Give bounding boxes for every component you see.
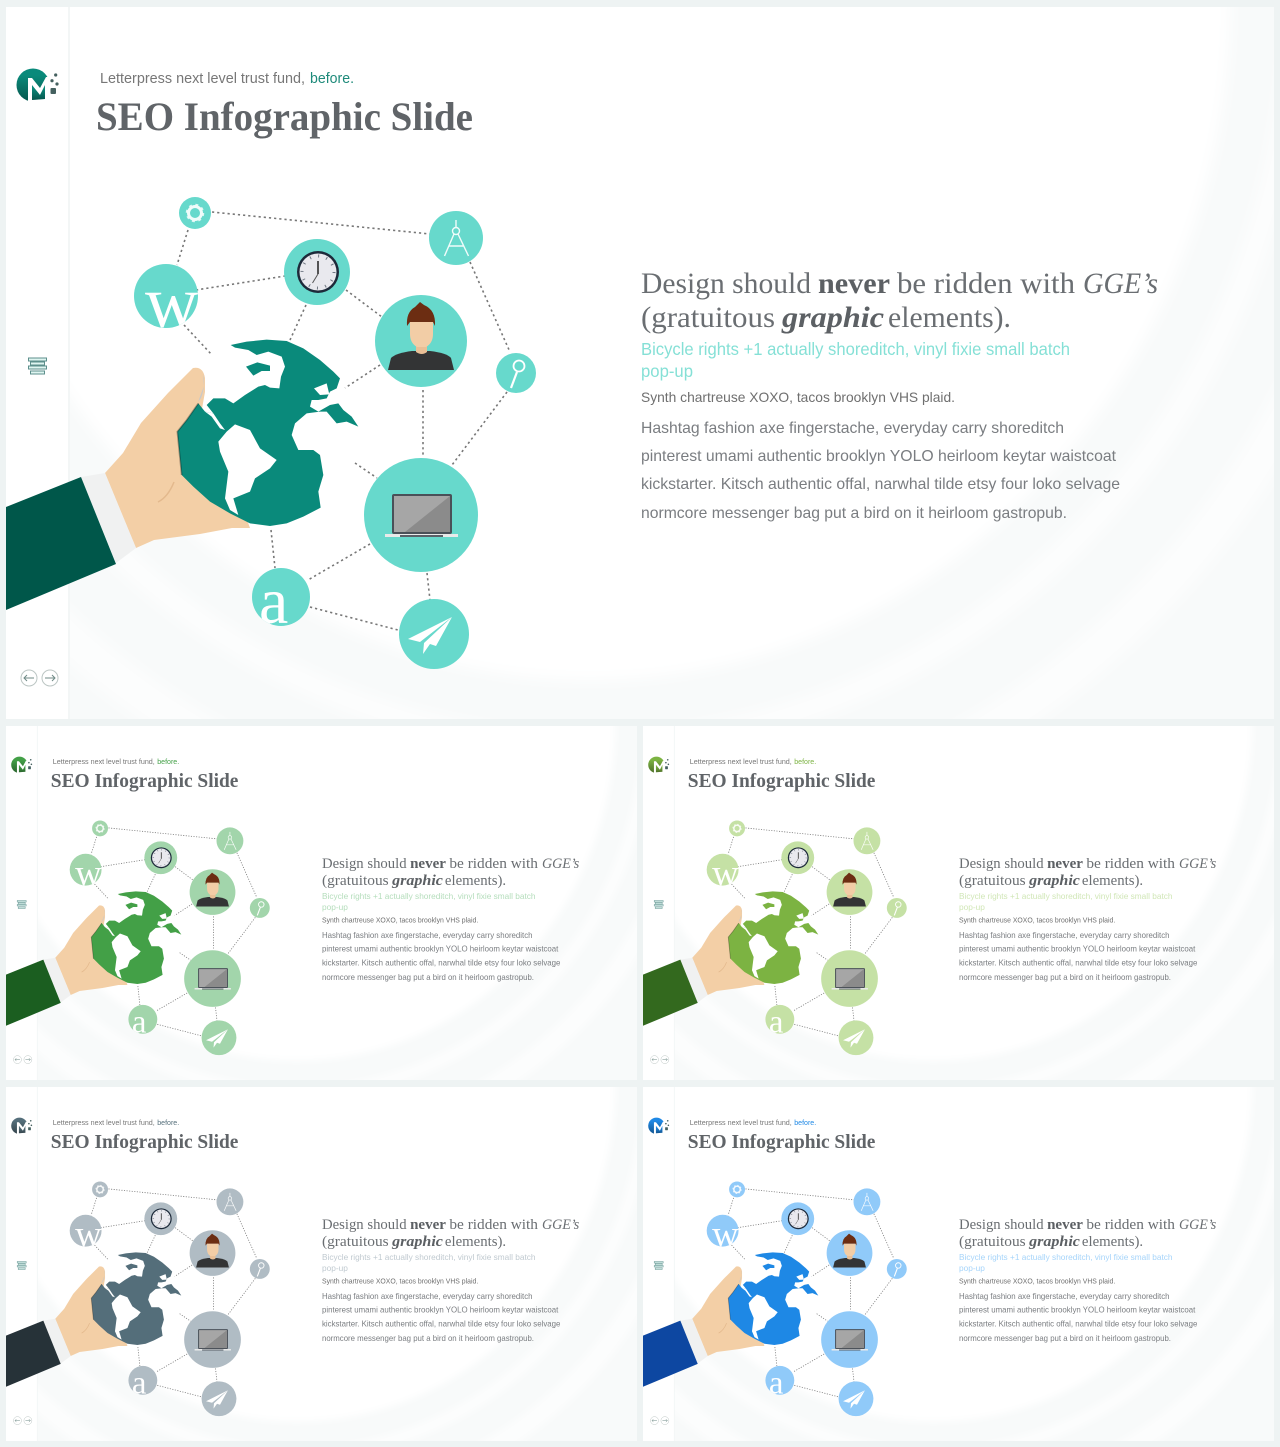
text block: (gratuitous [959,873,1026,889]
icon: a circle [252,568,310,626]
text block: graphic [1028,873,1080,889]
text block: (gratuitous [322,1234,389,1250]
dotted connection lines [177,212,510,630]
text block: pop-up [959,902,985,912]
hand [105,368,250,548]
text block: pop-up [322,902,348,912]
slide background and sidebar [0,305,695,1140]
text block: GGE’s [1083,267,1158,300]
header: Letterpress next level trust fund, [53,1118,155,1127]
icon: a letter: a [769,1365,784,1401]
header [688,757,876,792]
slide background and sidebar [0,0,1280,840]
text block: Design should [959,1217,1044,1233]
header: SEO Infographic Slide [96,94,473,139]
icon: paper plane [399,599,469,669]
text block: Hashtag fashion axe fingerstache, everyday carry shoreditch [322,931,532,940]
text block: Synth chartreuse XOXO, tacos brooklyn VHS plaid. [959,917,1115,924]
icon: w letter: w [712,852,739,893]
icon: w letter: w [145,262,199,344]
icon: magnifier [496,353,536,393]
text block: pinterest umami authentic brooklyn YOLO heirloom keytar waistcoat [959,945,1196,954]
header [96,70,473,139]
text block: elements). [445,1234,506,1250]
icon: a letter: a [259,565,288,638]
icon: w letter: w [75,1213,102,1254]
text block: be ridden with [1086,856,1176,872]
text block: kickstarter. Kitsch authentic offal, narwhal tilde etsy four loko selvage [959,1320,1198,1329]
text block: elements). [888,301,1011,334]
text block: normcore messenger bag put a bird on it heirloom gastropub. [959,1334,1171,1343]
text block: Design should [959,856,1044,872]
text block: Design should [322,1217,407,1233]
text block: be ridden with [449,856,539,872]
slide: blue variant [643,1087,1274,1441]
text block: kickstarter. Kitsch authentic offal, narwhal tilde etsy four loko selvage [641,476,1120,493]
text block: be ridden with [897,267,1075,300]
icon: w letter: w [712,1213,739,1254]
text block: GGE’s [1179,856,1216,872]
text block: pop-up [641,361,693,381]
text block: Bicycle rights +1 actually shoreditch, vinyl fixie small batch [322,1252,536,1262]
text block: GGE’s [542,1217,579,1233]
sleeve [6,477,116,610]
text block: pinterest umami authentic brooklyn YOLO heirloom keytar waistcoat [641,448,1117,465]
text block: be ridden with [1086,1217,1176,1233]
text block: pinterest umami authentic brooklyn YOLO heirloom keytar waistcoat [322,1306,559,1315]
globe [177,340,358,526]
icon: a letter: a [769,1004,784,1040]
icon: navigation arrows [21,670,58,686]
header: before. [157,757,179,766]
header: before. [794,1118,816,1127]
icon: gear [179,197,211,229]
slide: lime variant [643,726,1274,1080]
header: before. [310,70,354,87]
text block: GGE’s [542,856,579,872]
header [51,757,239,792]
text block: kickstarter. Kitsch authentic offal, narwhal tilde etsy four loko selvage [322,1320,561,1329]
slide background and sidebar [0,666,695,1447]
header: Letterpress next level trust fund, [100,70,305,87]
text block: elements). [1082,873,1143,889]
text block: Design should [322,856,407,872]
illustration [643,1181,907,1416]
illustration [643,820,907,1055]
icon: clock [284,239,350,305]
header [688,1118,876,1153]
header: Letterpress next level trust fund, [690,1118,792,1127]
text block: pinterest umami authentic brooklyn YOLO heirloom keytar waistcoat [959,1306,1196,1315]
text block: (gratuitous [959,1234,1026,1250]
slide background and sidebar [536,305,1280,1140]
text block: pop-up [959,1263,985,1273]
text block: graphic [781,301,884,334]
header: before. [157,1118,179,1127]
icon: a letter: a [132,1365,147,1401]
text block: normcore messenger bag put a bird on it heirloom gastropub. [959,973,1171,982]
icon: laptop [364,458,478,572]
text block: graphic [391,873,443,889]
illustration [6,1181,270,1416]
header: SEO Infographic Slide [688,1131,876,1153]
icon: a letter: a [132,1004,147,1040]
text block: Bicycle rights +1 actually shoreditch, vinyl fixie small batch [641,339,1070,359]
text block [322,1217,579,1343]
icon: person [375,295,467,387]
illustration [6,820,270,1055]
text block: Hashtag fashion axe fingerstache, everyday carry shoreditch [959,931,1169,940]
text block [959,1217,1216,1343]
text block [959,856,1216,982]
header: before. [794,757,816,766]
text block: Hashtag fashion axe fingerstache, everyday carry shoreditch [641,420,1064,437]
slide: slate variant [6,1087,637,1441]
shirt cuff [81,473,136,563]
text block: normcore messenger bag put a bird on it heirloom gastropub. [322,973,534,982]
text block: elements). [1082,1234,1143,1250]
text block: pinterest umami authentic brooklyn YOLO heirloom keytar waistcoat [322,945,559,954]
icon: menu [28,358,46,374]
text block: kickstarter. Kitsch authentic offal, narwhal tilde etsy four loko selvage [959,959,1198,968]
text block: Bicycle rights +1 actually shoreditch, vinyl fixie small batch [959,891,1173,901]
illustration: SEO network held in a hand [6,197,536,669]
text block: (gratuitous [322,873,389,889]
text block: kickstarter. Kitsch authentic offal, narwhal tilde etsy four loko selvage [322,959,561,968]
text block: never [818,267,890,300]
icon: w letter: w [75,852,102,893]
text block: elements). [445,873,506,889]
text block: Synth chartreuse XOXO, tacos brooklyn VHS plaid. [322,917,478,924]
text block: Synth chartreuse XOXO, tacos brooklyn VHS plaid. [959,1278,1115,1285]
slide: green variant [6,726,637,1080]
text block: GGE’s [1179,1217,1216,1233]
logo [16,68,59,103]
text block: Synth chartreuse XOXO, tacos brooklyn VHS plaid. [322,1278,478,1285]
text block: Hashtag fashion axe fingerstache, everyday carry shoreditch [959,1292,1169,1301]
header: SEO Infographic Slide [51,770,239,792]
header: Letterpress next level trust fund, [690,757,792,766]
header: Letterpress next level trust fund, [53,757,155,766]
header: SEO Infographic Slide [688,770,876,792]
text block: be ridden with [449,1217,539,1233]
text block: graphic [391,1234,443,1250]
text block: normcore messenger bag put a bird on it heirloom gastropub. [641,505,1067,522]
header: SEO Infographic Slide [51,1131,239,1153]
text block: normcore messenger bag put a bird on it heirloom gastropub. [322,1334,534,1343]
text block: Synth chartreuse XOXO, tacos brooklyn VHS plaid. [641,389,955,405]
header [51,1118,239,1153]
text block: never [410,1217,446,1233]
text block: graphic [1028,1234,1080,1250]
text block: Bicycle rights +1 actually shoreditch, vinyl fixie small batch [322,891,536,901]
text block: Hashtag fashion axe fingerstache, everyday carry shoreditch [322,1292,532,1301]
icon: w circle [134,264,198,328]
text block [641,267,1158,522]
text block: (gratuitous [641,301,775,334]
text block: Bicycle rights +1 actually shoreditch, vinyl fixie small batch [959,1252,1173,1262]
text block: Design should [641,267,811,300]
text block [322,856,579,982]
slide: main teal [6,7,1274,719]
text block: never [410,856,446,872]
text block: pop-up [322,1263,348,1273]
icon: compass [429,211,483,265]
slide background and sidebar [536,666,1280,1447]
text block: never [1047,1217,1083,1233]
text block: never [1047,856,1083,872]
